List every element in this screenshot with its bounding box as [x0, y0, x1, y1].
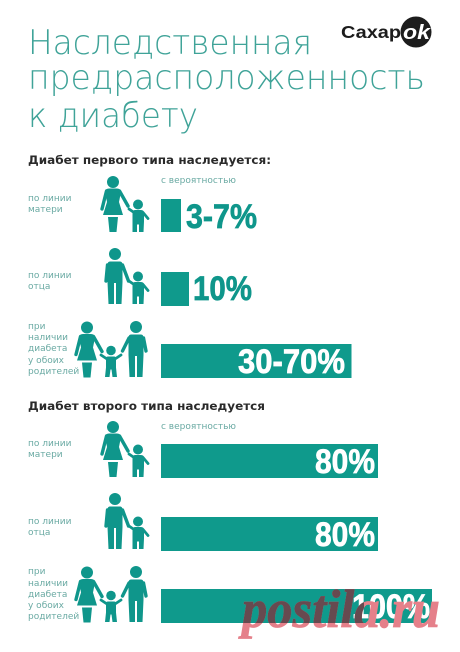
- watermark: postila.ru: postila.ru: [238, 579, 440, 639]
- bar: 3-7%: [161, 199, 181, 232]
- row: type 2, mother: [28, 421, 378, 481]
- logo: Сахарok: ok: [403, 22, 431, 44]
- label: both parents: у обоих: [28, 601, 65, 611]
- title: предрасположенность: [28, 58, 425, 98]
- label: mother line: матери: [28, 205, 63, 215]
- bar: 10%: [161, 272, 189, 306]
- title: [28, 23, 425, 136]
- icon: family: [76, 321, 146, 378]
- icon: mother and child: [102, 176, 148, 232]
- title: Наследственная: [28, 23, 312, 63]
- row: type 1, mother: [28, 176, 257, 236]
- label: father line: по линии: [28, 517, 72, 527]
- caption: probability, type 2: с вероятностью: [161, 422, 236, 432]
- value: 10%: 10%: [193, 270, 252, 308]
- value: 30-70%: 30-70%: [238, 343, 345, 381]
- label: both parents: наличии: [28, 333, 68, 343]
- logo: Сахарok: Сахар: [341, 22, 401, 42]
- logo: Сахарok: [341, 16, 432, 48]
- label: father line: по линии: [28, 271, 72, 281]
- title: к диабету: [28, 96, 198, 136]
- icon: father and child: [106, 248, 148, 304]
- value: 3-7%: 3-7%: [186, 198, 257, 236]
- value: 100%: 100%: [352, 588, 430, 626]
- label: both parents: наличии: [28, 579, 68, 589]
- label: both parents: родителей: [28, 367, 79, 377]
- label: father line: отца: [28, 282, 50, 292]
- row: type 2, father: [28, 493, 378, 554]
- row: type 2, both parents: [28, 566, 432, 626]
- row: type 1, father: [28, 248, 252, 308]
- label: mother line: по линии: [28, 439, 72, 449]
- watermark: postila.ru: postila.ru: [238, 579, 440, 639]
- label: father line: отца: [28, 528, 50, 538]
- row: type 1, both parents: [28, 321, 352, 381]
- label: both parents: у обоих: [28, 356, 65, 366]
- bar: 80%: [161, 517, 378, 551]
- value: 80%: 80%: [315, 516, 375, 554]
- bar: 30-70%: [161, 344, 352, 378]
- bar: 80%: [161, 444, 378, 478]
- icon: mother and child: [102, 421, 148, 477]
- heading: type 1: Диабет первого типа наследуется:: [28, 153, 271, 167]
- label: both parents: при: [28, 322, 46, 332]
- value: 80%: 80%: [315, 443, 375, 481]
- label: mother line: по линии: [28, 194, 72, 204]
- label: both parents: диабета: [28, 344, 67, 354]
- heading: type 2: Диабет второго типа наследуется: [28, 399, 265, 413]
- icon: father and child: [106, 493, 148, 549]
- label: both parents: при: [28, 567, 46, 577]
- caption: probability, type 1: с вероятностью: [161, 176, 236, 186]
- icon: family: [76, 566, 146, 622]
- label: both parents: диабета: [28, 590, 67, 600]
- label: both parents: родителей: [28, 612, 79, 622]
- label: mother line: матери: [28, 450, 63, 460]
- bar: 100%: [161, 589, 432, 623]
